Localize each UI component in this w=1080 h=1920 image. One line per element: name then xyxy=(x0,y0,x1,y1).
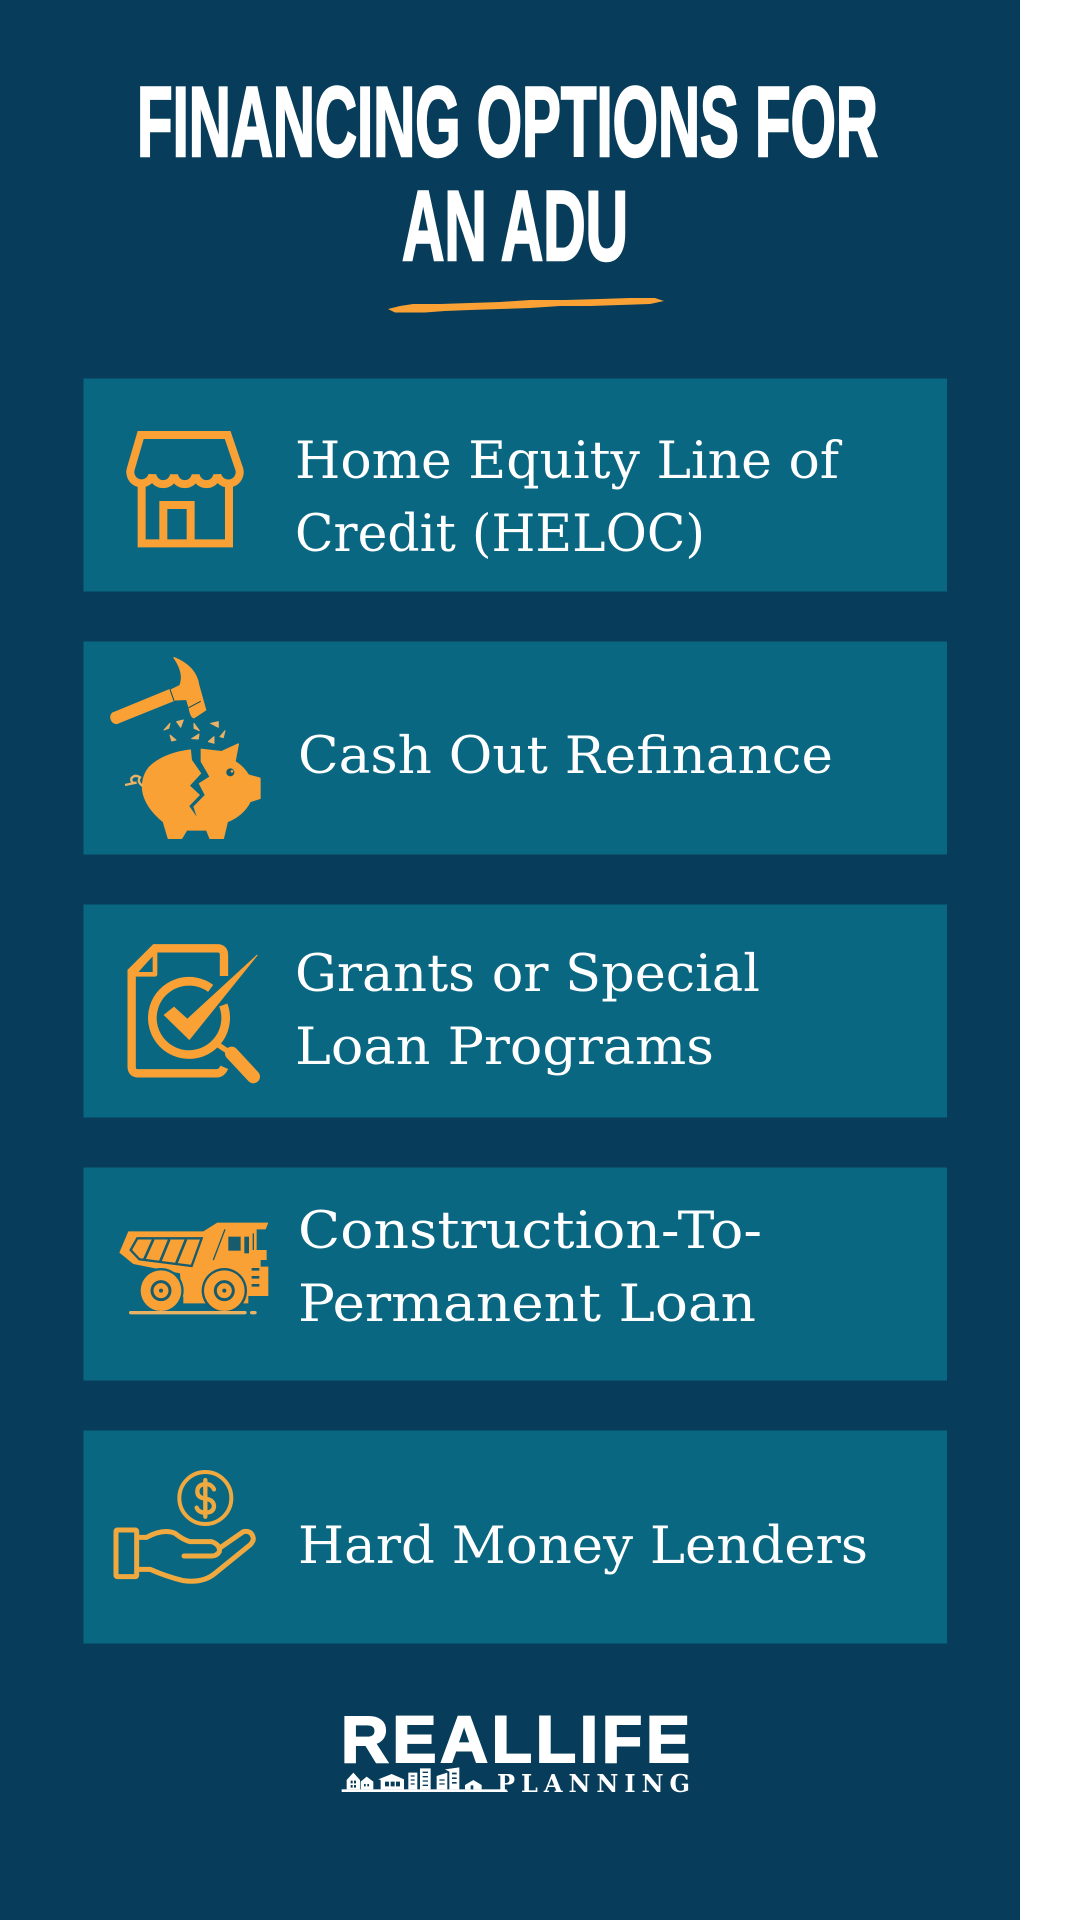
label: Grants or Special Loan Programs: Loan Programs xyxy=(295,1018,714,1077)
icon: hand holding dollar coin xyxy=(116,1472,253,1581)
card background xyxy=(84,1168,947,1380)
card: Cash Out Refinance xyxy=(84,642,947,854)
card background xyxy=(84,378,947,592)
logo: RealLife Planning: REALLIFE xyxy=(341,1702,690,1776)
card background xyxy=(84,1430,947,1644)
card: Home Equity Line of Credit xyxy=(84,378,947,592)
label: Home Equity Line of Credit (HELOC): Home Equity Line of xyxy=(295,432,842,491)
card background xyxy=(84,642,947,854)
card: Hard Money Lenders xyxy=(84,1430,947,1644)
label: Construction-To-Permanent Loan xyxy=(298,1202,762,1334)
label: Grants or Special Loan Programs: Grants or Special xyxy=(295,945,760,1004)
label: Home Equity Line of Credit (HELOC): Credit (HELOC) xyxy=(295,505,705,564)
orange brush underline xyxy=(388,298,664,312)
icon: skyline xyxy=(342,1767,507,1792)
title: AN ADU xyxy=(402,170,628,281)
label: Home Equity Line of Credit (HELOC) xyxy=(295,432,842,564)
label: Grants or Special Loan Programs xyxy=(295,945,760,1077)
card background xyxy=(84,904,947,1118)
icon: hammer breaking piggy bank xyxy=(111,658,260,838)
logo: RealLife Planning: PLANNING xyxy=(497,1769,690,1798)
title xyxy=(137,66,878,281)
label: Cash Out Refinance: Cash Out Refinance xyxy=(298,727,833,786)
icon: store front xyxy=(130,435,240,543)
label: Hard Money Lenders: Hard Money Lenders xyxy=(298,1517,868,1576)
card: Construction-To-Permanent Loan xyxy=(84,1168,947,1380)
icon: document with magnifier and check xyxy=(132,948,257,1077)
label: Construction-To-Permanent Loan: Permanent Loan xyxy=(298,1275,756,1334)
icon: dump truck xyxy=(119,1223,268,1313)
card: Grants or Special Loan Programs xyxy=(84,904,947,1118)
label: Construction-To-Permanent Loan: Construction-To- xyxy=(298,1202,762,1261)
